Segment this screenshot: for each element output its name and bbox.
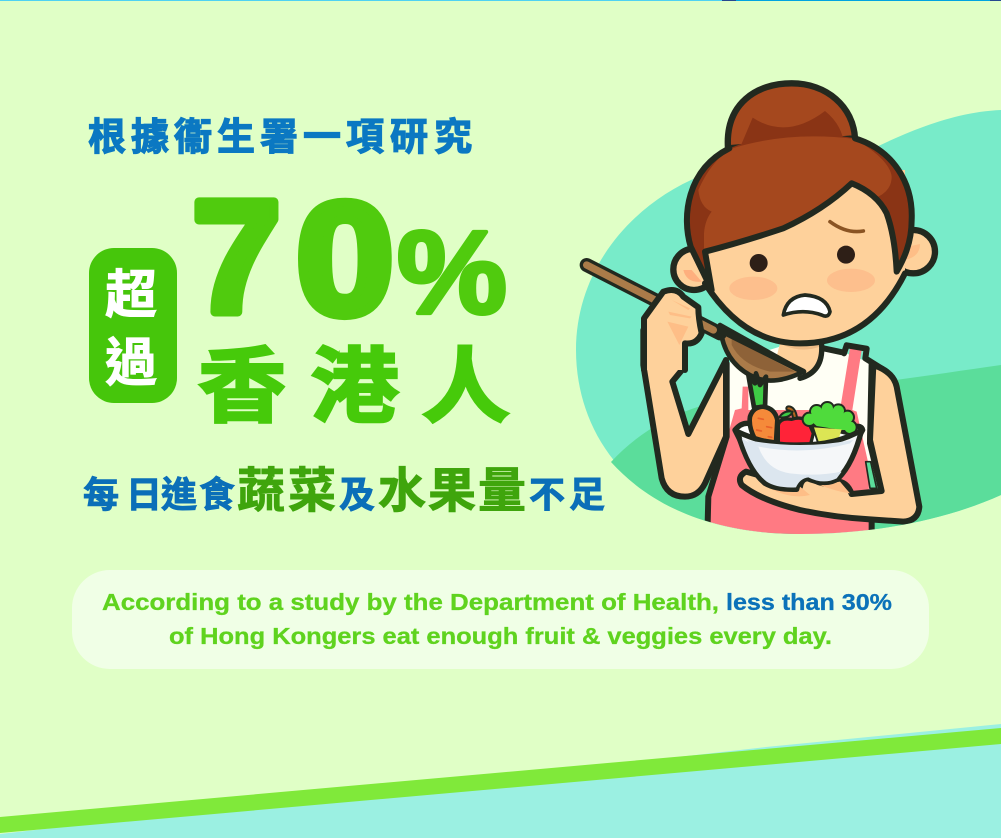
big number: 70%: % bbox=[397, 207, 507, 339]
broccoli bbox=[802, 401, 858, 443]
statement: insufficient vegetable and fruit intake bbox=[83, 465, 605, 518]
wooden spoon bbox=[587, 265, 803, 381]
hand holding spoon bbox=[644, 290, 702, 370]
carrot bbox=[748, 373, 777, 443]
bottom green band bbox=[0, 728, 1001, 833]
right arm bbox=[740, 365, 919, 522]
english summary panel: According to a study by the Department of Health, bbox=[102, 589, 719, 615]
big number: 70%: 7 bbox=[192, 167, 281, 346]
background blob bbox=[576, 110, 1001, 534]
heading: study source: 根據衞生署一項研究 bbox=[88, 117, 472, 159]
english summary panel: of Hong Kongers eat enough fruit & veggies every day. bbox=[169, 623, 832, 649]
eyes and cheeks bbox=[750, 254, 768, 272]
badge: over: 超 bbox=[105, 267, 157, 325]
apple bbox=[778, 408, 813, 444]
statement: insufficient vegetable and fruit intake: 及 bbox=[339, 474, 375, 515]
left arm bbox=[647, 370, 723, 494]
bun bbox=[728, 83, 855, 148]
heading: Hong Kong people: 香港人 bbox=[198, 342, 510, 433]
food bowl bbox=[735, 373, 863, 489]
statement: insufficient vegetable and fruit intake: 水果量 bbox=[378, 465, 526, 518]
bottom teal wedge bbox=[0, 724, 1001, 838]
english summary panel bbox=[72, 570, 929, 669]
background hill bbox=[611, 365, 1001, 534]
head bbox=[673, 83, 935, 343]
big number: 70%: 0 bbox=[296, 169, 394, 348]
english summary panel: less than 30% bbox=[726, 589, 892, 615]
statement: insufficient vegetable and fruit intake: 蔬菜 bbox=[237, 465, 336, 518]
badge: over bbox=[89, 248, 177, 403]
big number: 70% bbox=[192, 167, 507, 348]
mouth bbox=[783, 295, 830, 316]
body bbox=[643, 330, 919, 543]
illustration: woman tasting vegetables bbox=[576, 83, 1001, 543]
statement: insufficient vegetable and fruit intake: 每日進食 bbox=[83, 474, 235, 515]
hair bbox=[687, 134, 912, 290]
badge: over: 過 bbox=[105, 335, 157, 393]
face bbox=[703, 170, 905, 343]
bowl body bbox=[737, 430, 862, 489]
statement: insufficient vegetable and fruit intake: 不足 bbox=[529, 474, 605, 515]
